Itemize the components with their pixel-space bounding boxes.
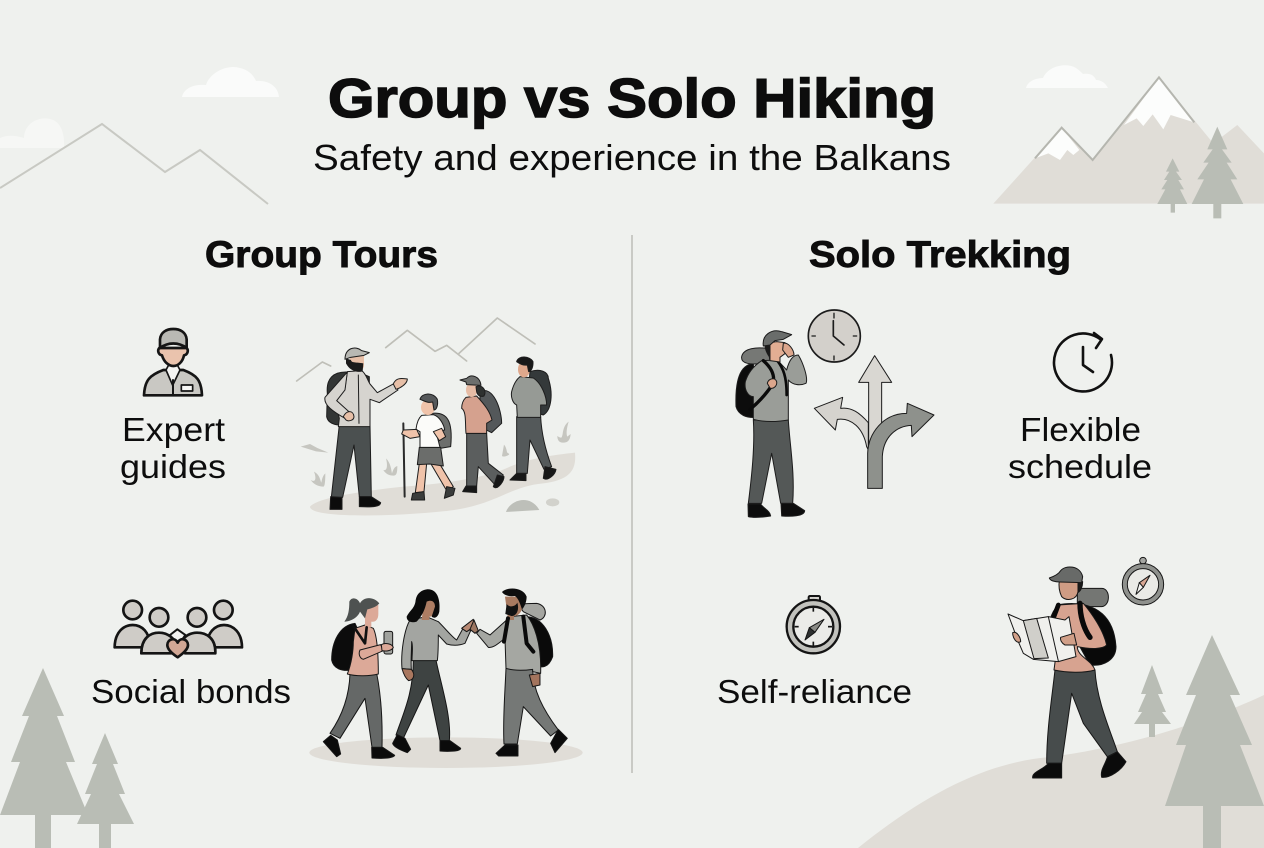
backpack xyxy=(1077,588,1108,607)
arrow: straight xyxy=(859,356,892,443)
label: Self-reliance: Self-reliance xyxy=(717,673,912,710)
heading: Group Tours: Group Tours xyxy=(205,234,438,275)
divider xyxy=(631,235,633,773)
woman with ponytail xyxy=(332,623,365,670)
mountains: top right xyxy=(993,77,1264,204)
tree: top right small xyxy=(1157,158,1187,213)
tree: bottom right large xyxy=(1165,635,1264,848)
rocks and grass xyxy=(301,422,571,512)
label: Flexible schedule xyxy=(1008,411,1152,485)
hiker: woman with cap xyxy=(480,391,502,433)
tree: bottom left small xyxy=(77,733,134,848)
tree: bottom left large xyxy=(0,668,88,848)
arrow: left xyxy=(814,397,868,450)
clock xyxy=(808,310,860,362)
cloud: top right xyxy=(1026,65,1108,88)
illustration: solo hiker at crossroads xyxy=(736,310,934,517)
background hills xyxy=(297,318,535,381)
label: Expert guides: guides xyxy=(120,448,226,485)
man with beard xyxy=(521,603,545,620)
arrow: right xyxy=(868,403,934,488)
title: Group vs Solo Hiking xyxy=(328,67,936,129)
label: Flexible schedule: schedule xyxy=(1008,448,1152,485)
icon: social bonds xyxy=(115,601,242,657)
cloud: far left small xyxy=(0,118,64,148)
mountain outline: top left xyxy=(0,124,268,204)
hiker xyxy=(736,363,757,417)
illustration: guide and hikers xyxy=(297,318,575,515)
icon: expert guide xyxy=(144,329,202,395)
tree: top right large xyxy=(1192,127,1243,218)
hiker: guide xyxy=(327,372,347,425)
illustration: hiker with map xyxy=(1008,557,1164,778)
icon: compass xyxy=(787,596,840,653)
subtitle: Safety and experience in the Balkans xyxy=(313,137,951,178)
path xyxy=(310,453,575,515)
label: Flexible schedule: Flexible xyxy=(1020,411,1141,448)
hiker: child xyxy=(432,413,451,448)
ground shadow xyxy=(309,737,583,768)
hill: bottom right xyxy=(858,695,1264,848)
tree: bottom right small xyxy=(1134,665,1171,737)
cloud: top left large xyxy=(182,67,279,97)
label: Social bonds: Social bonds xyxy=(91,673,291,710)
woman with long hair xyxy=(396,660,450,741)
map xyxy=(1008,614,1076,662)
compass xyxy=(1122,557,1164,605)
heading: Solo Trekking: Solo Trekking xyxy=(809,234,1071,275)
label: Expert guides: Expert xyxy=(122,411,225,448)
icon: flexible schedule clock xyxy=(1054,333,1112,391)
hiker: man in back xyxy=(527,370,551,415)
illustration: friends high five xyxy=(309,588,583,768)
label: Expert guides xyxy=(120,411,226,485)
